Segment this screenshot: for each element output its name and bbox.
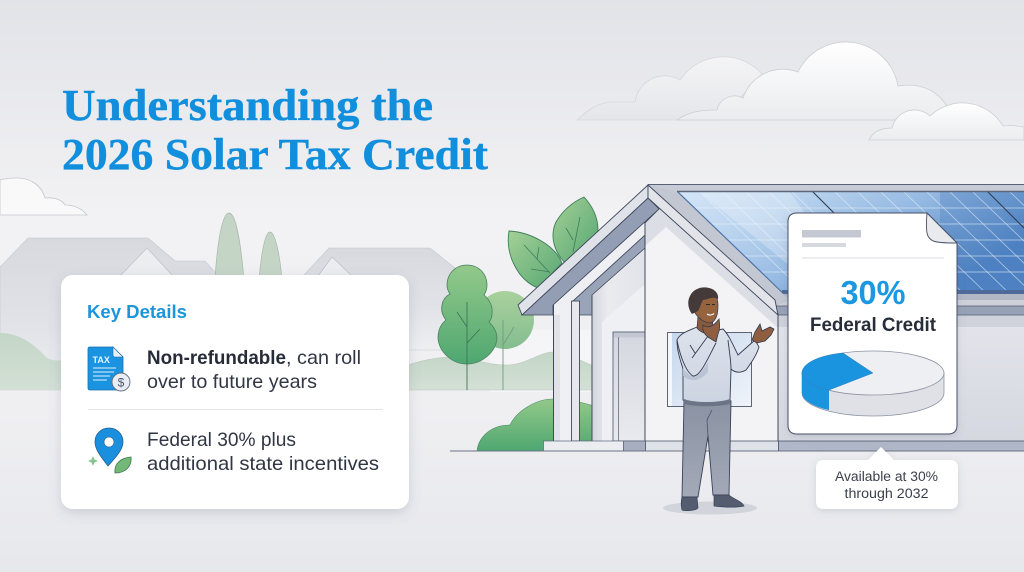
item two text	[147, 429, 379, 475]
hills right	[400, 352, 600, 390]
roof surface	[648, 185, 1024, 300]
credit percent: 30%	[840, 274, 906, 311]
door	[613, 332, 645, 441]
folded corner	[926, 213, 957, 243]
item one text: over to future years	[147, 371, 317, 393]
sleeve shade	[683, 362, 708, 380]
title	[62, 81, 488, 179]
gable roof left	[518, 185, 648, 315]
tree: layered	[438, 265, 497, 390]
open porch backdrop	[490, 330, 600, 392]
solar panels	[677, 191, 1024, 294]
cloud: front right	[677, 42, 960, 120]
window	[668, 332, 752, 406]
shadow	[663, 502, 757, 514]
hair	[688, 287, 718, 314]
item two text: Federal 30% plus	[147, 429, 296, 451]
background houses left	[0, 238, 240, 390]
icon: tax document: $	[118, 376, 125, 390]
face details	[706, 304, 715, 306]
title: 2026 Solar Tax Credit	[62, 130, 488, 179]
callout: through 2032	[844, 486, 928, 501]
icon: location pin with leaf	[88, 428, 131, 473]
header bar	[802, 230, 861, 238]
hem shade	[684, 399, 730, 406]
pants	[682, 401, 731, 497]
person	[663, 287, 774, 514]
eave	[775, 294, 1024, 300]
leaf: lower	[508, 231, 562, 288]
porch dark strip	[573, 235, 645, 315]
shoes	[681, 495, 744, 511]
item one text	[147, 347, 361, 393]
callout	[816, 447, 958, 509]
credit label: Federal Credit	[810, 314, 936, 336]
leaf: upper	[553, 197, 598, 263]
porch fascia	[553, 209, 659, 315]
icon: tax document	[88, 347, 130, 391]
right wall	[778, 313, 1024, 441]
item one text: , can roll	[286, 347, 361, 369]
document card	[788, 213, 957, 434]
item one text: Non-refundable	[147, 347, 286, 369]
wall corner	[777, 313, 779, 451]
cloud: back right	[577, 57, 762, 120]
neck	[697, 316, 713, 334]
tree: light round	[476, 291, 534, 390]
panel heading: Key Details	[87, 302, 187, 322]
gable soffit	[522, 198, 659, 315]
pie chart	[802, 351, 944, 416]
house	[450, 184, 1024, 451]
head	[691, 291, 718, 323]
front gable wall	[645, 209, 778, 441]
item two text: additional state incentives	[147, 453, 379, 475]
gable roof right	[648, 185, 790, 306]
chin hand	[703, 319, 720, 342]
background trees	[215, 213, 282, 280]
left arm lines	[677, 336, 731, 376]
open hand	[752, 324, 774, 343]
base	[544, 441, 624, 451]
panel: key details	[61, 275, 409, 509]
background houses right	[300, 248, 455, 350]
smile	[707, 314, 714, 315]
sweater	[677, 327, 759, 403]
porch pillar	[554, 305, 572, 441]
title: Understanding the	[62, 81, 433, 130]
bush	[477, 399, 594, 451]
porch inner wall	[592, 248, 645, 441]
cloud: left	[0, 178, 87, 215]
cloud: small right	[869, 103, 1024, 140]
porch column	[572, 301, 580, 441]
icon: tax document: TAX	[92, 355, 110, 365]
callout: Available at 30%	[835, 469, 938, 484]
header sub bar	[802, 243, 846, 247]
hills left	[0, 333, 70, 390]
